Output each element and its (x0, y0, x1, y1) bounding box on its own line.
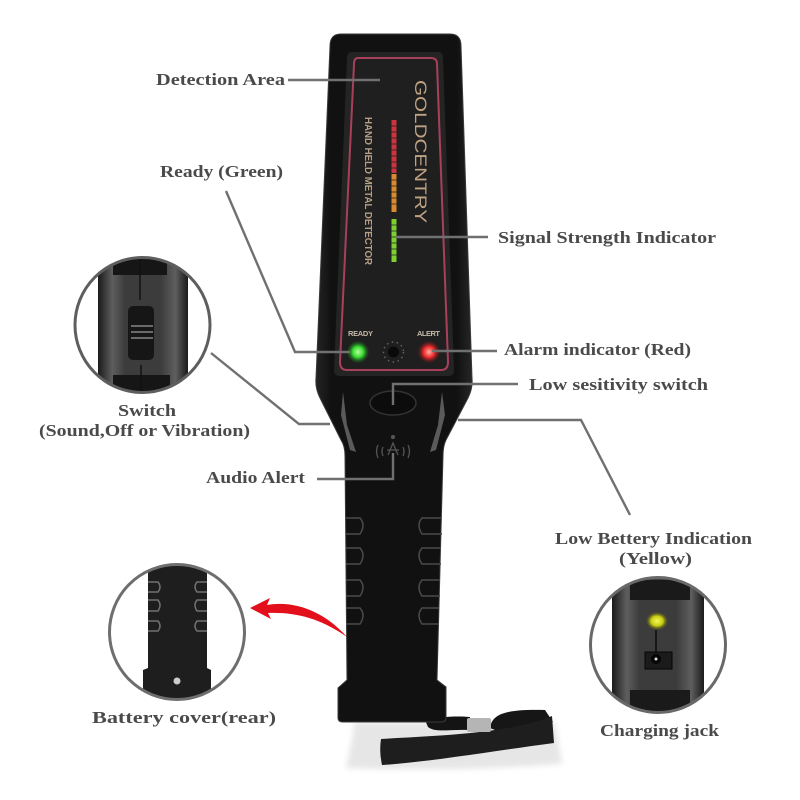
product text: HAND HELD METAL DETECTOR (362, 117, 374, 265)
leader lines (211, 80, 630, 515)
alert LED (418, 341, 440, 363)
alert label: ALERT (417, 329, 440, 338)
detection panel (340, 58, 448, 370)
label: low sensitivity switch: Low sesitivity switch (529, 375, 708, 394)
floor shadow (346, 722, 562, 769)
label: yellow: (Yellow) (619, 549, 692, 568)
recessed panel (334, 52, 454, 376)
label: ready: Ready (Green) (160, 162, 283, 181)
inset: battery cover (110, 564, 244, 700)
label: signal strength: Signal Strength Indicator (498, 228, 716, 247)
grip ridges (346, 518, 442, 624)
label: audio alert: Audio Alert (206, 468, 306, 487)
label: low battery: Low Bettery Indication (555, 529, 752, 548)
neck highlights (341, 392, 445, 452)
label: switch modes: (Sound,Off or Vibration) (39, 421, 250, 440)
audio icon (376, 436, 410, 458)
label: alarm: Alarm indicator (Red) (504, 340, 691, 359)
label: battery cover: Battery cover(rear) (92, 708, 276, 727)
inset: charging jack (590, 575, 726, 715)
wrist strap (380, 710, 554, 765)
low sensitivity button (370, 391, 416, 415)
brand text: GOLDCENTRY (411, 80, 430, 223)
red arrow (250, 598, 347, 637)
label: charging jack: Charging jack (600, 721, 720, 740)
speaker holes (384, 342, 404, 362)
detector body (316, 34, 472, 722)
ready label: READY (348, 329, 373, 338)
label: detection area: Detection Area (156, 70, 285, 89)
label: switch: Switch (118, 401, 176, 420)
ready LED (347, 341, 369, 363)
inset: switch (75, 255, 210, 395)
signal strength LED bar (391, 120, 397, 262)
